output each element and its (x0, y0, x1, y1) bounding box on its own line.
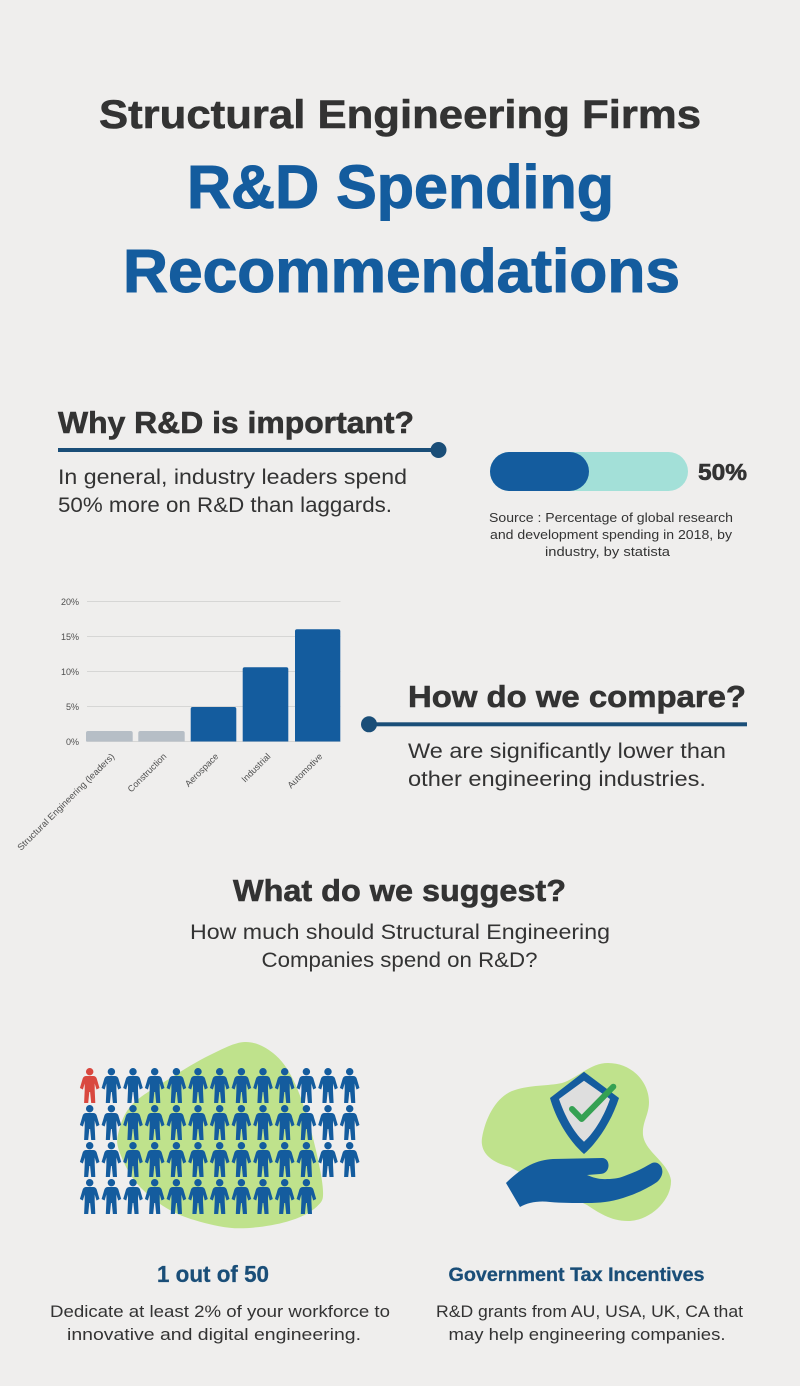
panel: 1 out of 50 (50, 1261, 390, 1344)
y axis labels (61, 597, 79, 747)
text block: industry leaders: In general, industry leaders spend (58, 466, 407, 489)
panel: what do we suggest (190, 873, 610, 972)
progress bar: 50% (490, 452, 747, 491)
title: R&D Spending (187, 153, 614, 221)
panel: how do we compare (361, 679, 747, 791)
text block: R&D grants: R&D grants from AU, USA, UK, CA that (436, 1302, 743, 1321)
shield (550, 1072, 619, 1154)
x axis labels: Aerospace (183, 751, 220, 789)
heading: 1 out of 50: 1 out of 50 (157, 1261, 269, 1287)
text block: lower than other industries: We are significantly lower than (408, 740, 726, 763)
divider with dot (58, 442, 446, 458)
title: Structural Engineering Firms (99, 93, 701, 137)
text block: question (190, 921, 610, 972)
y axis labels: 10% (61, 667, 79, 677)
y axis labels: 20% (61, 597, 79, 607)
panel: government tax incentives (436, 1265, 743, 1344)
x axis labels: Structural Engineering (leaders) (15, 751, 116, 852)
y axis labels: 5% (66, 702, 79, 712)
heading: why R&D is important: Why R&D is important? (58, 405, 414, 440)
x axis labels: Automotive (286, 751, 324, 790)
icon: people pictogram, 1 out of 50 (80, 1042, 360, 1228)
text block: R&D grants (436, 1302, 743, 1344)
bars (86, 629, 340, 742)
title (99, 93, 701, 305)
text block: industry leaders: 50% more on R&D than laggards. (58, 494, 392, 517)
text block: dedicate workforce: innovative and digital engineering. (67, 1325, 361, 1344)
hand (506, 1158, 662, 1207)
heading: government tax incentives: Government Tax Incentives (448, 1265, 704, 1286)
text block: question: How much should Structural Engineering (190, 921, 610, 944)
text block: lower than other industries: other engineering industries. (408, 768, 706, 791)
y axis labels: 15% (61, 632, 79, 642)
source note: industry, by statista (545, 544, 671, 559)
text block: lower than other industries (408, 740, 726, 791)
text block: dedicate workforce: Dedicate at least 2% of your workforce to (50, 1302, 390, 1321)
text block: industry leaders (58, 466, 407, 517)
bar chart (15, 597, 341, 852)
title: Recommendations (123, 237, 680, 305)
x axis labels: Construction (126, 751, 168, 794)
y axis labels: 0% (66, 737, 79, 747)
progress bar: 50%: 50% (698, 459, 747, 485)
source note (489, 510, 733, 559)
panel: why R&D is important (58, 405, 446, 517)
divider with dot (361, 716, 747, 732)
heading: how do we compare: How do we compare? (408, 679, 746, 714)
green blob (117, 1042, 323, 1228)
icon: hand holding shield with check (482, 1063, 671, 1221)
source note: Source : Percentage of global research (489, 510, 733, 525)
source note: and development spending in 2018, by (490, 527, 733, 542)
heading: what do we suggest: What do we suggest? (233, 873, 566, 908)
check mark (572, 1087, 613, 1119)
x axis labels (15, 751, 324, 852)
text block: question: Companies spend on R&D? (262, 949, 538, 972)
text block: dedicate workforce (50, 1302, 390, 1344)
x axis labels: Industrial (240, 751, 272, 784)
text block: R&D grants: may help engineering companies. (448, 1325, 726, 1344)
green blob (482, 1063, 671, 1221)
person figures (80, 1068, 360, 1214)
